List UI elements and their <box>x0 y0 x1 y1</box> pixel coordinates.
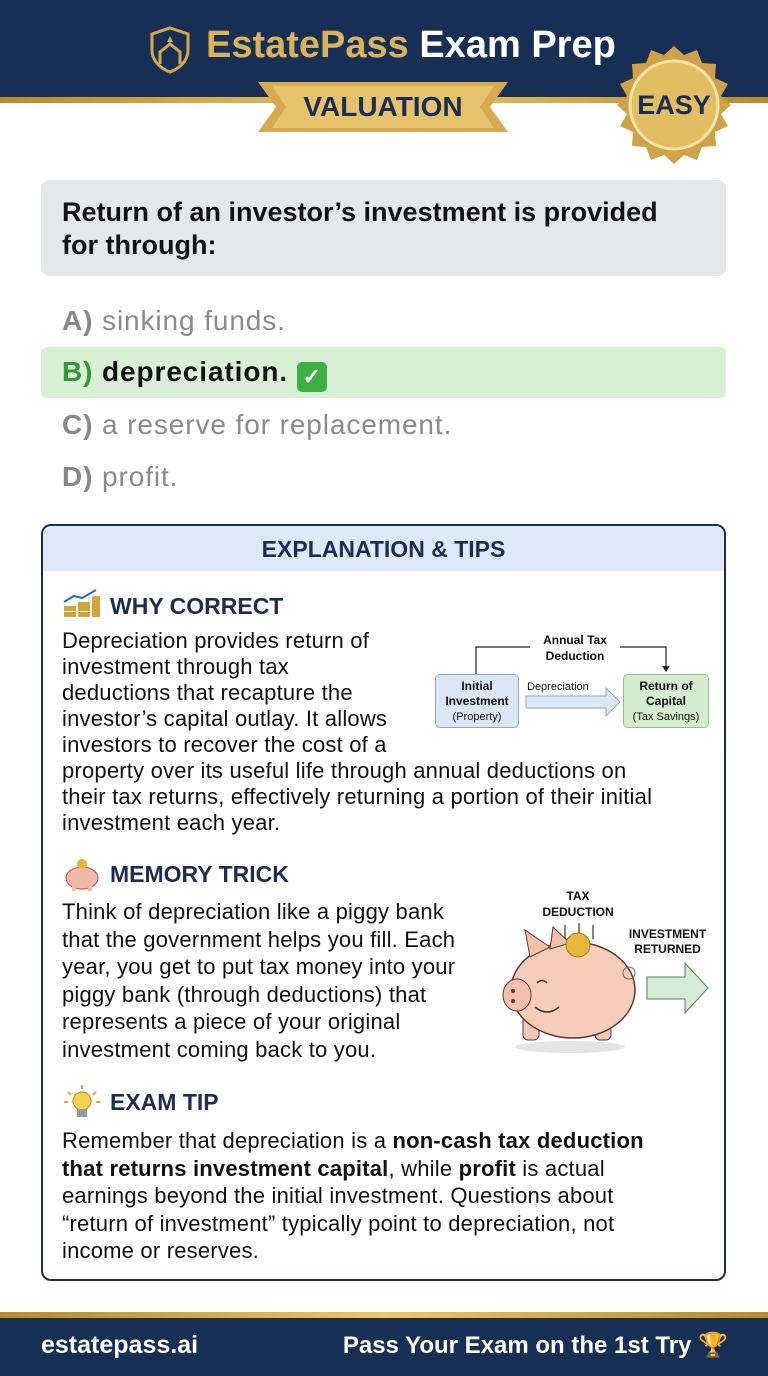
diagram: depreciation flow: (Tax Savings) <box>633 711 699 723</box>
ribbon: VALUATION <box>258 82 508 132</box>
option A: A) sinking funds. <box>62 305 286 336</box>
footer left text: estatepass.ai <box>41 1331 198 1359</box>
text: why correct: deductions that recapture the <box>62 680 353 705</box>
question box <box>41 180 726 276</box>
diagram: depreciation flow: Capital <box>646 694 686 708</box>
text: why correct: investment through tax <box>62 654 289 679</box>
diagram: depreciation flow: Depreciation <box>527 681 589 693</box>
icon: coins chart <box>64 589 100 617</box>
footer <box>0 1312 768 1376</box>
text: why correct: investor’s capital outlay. It allows <box>62 706 387 731</box>
illustration: piggy bank: INVESTMENT <box>629 927 706 941</box>
illustration: piggy bank: RETURNED <box>634 942 701 956</box>
text: exam tip <box>62 1128 644 1263</box>
icon: piggy <box>66 859 98 891</box>
heading: why correct: WHY CORRECT <box>110 593 283 619</box>
text: why correct: investment each year. <box>62 810 280 835</box>
footer right text: Pass Your Exam on the 1st Try 🏆 <box>343 1332 728 1359</box>
diagram: depreciation flow <box>435 633 709 728</box>
illustration: piggy bank <box>502 889 709 1053</box>
text: why correct <box>62 628 652 835</box>
title: EstatePass Exam Prep <box>206 24 616 66</box>
text: memory trick <box>62 899 455 1062</box>
panel header <box>43 526 724 571</box>
option B (correct) <box>41 347 726 398</box>
panel: explanation <box>41 524 726 1281</box>
diagram: depreciation flow: (Property) <box>453 711 501 723</box>
option B (correct): B) depreciation. <box>62 356 288 387</box>
heading: memory trick: MEMORY TRICK <box>110 861 289 887</box>
text: memory trick: piggy bank (through deductions) that <box>62 982 426 1006</box>
option D: D) profit. <box>62 461 178 492</box>
badge: EASY: EASY <box>637 90 711 120</box>
text: memory trick: Think of depreciation like a piggy bank <box>62 899 444 924</box>
illustration: piggy bank: TAX <box>566 889 590 903</box>
diagram: depreciation flow: Initial <box>461 679 493 693</box>
diagram: depreciation flow: Return of <box>639 679 693 693</box>
diagram: depreciation flow: Annual Tax Deduction <box>543 633 607 663</box>
heading: exam tip: EXAM TIP <box>110 1089 219 1115</box>
text: memory trick: year, you get to put tax money into your <box>62 954 455 979</box>
ribbon: VALUATION: VALUATION <box>303 91 463 122</box>
option C: C) a reserve for replacement. <box>62 409 452 440</box>
text: why correct: their tax returns, effectively returning a portion of their initial <box>62 784 652 809</box>
header band <box>0 0 768 97</box>
icon: lightbulb <box>64 1085 100 1117</box>
diagram: depreciation flow: Investment <box>445 694 509 708</box>
badge: EASY <box>617 46 731 164</box>
question box: Return of an investor’s investment is provided <box>62 197 658 227</box>
text: exam tip: Remember that depreciation is a non-cash tax deduction <box>62 1128 644 1153</box>
text: exam tip: “return of investment” typically point to depreciation, not <box>62 1210 614 1236</box>
text: why correct: investors to recover the cost of a <box>62 732 387 757</box>
text: exam tip: earnings beyond the initial investment. Questions about <box>62 1183 614 1208</box>
text: memory trick: represents a piece of your original <box>62 1009 400 1034</box>
illustration: piggy bank: DEDUCTION <box>542 905 614 919</box>
text: why correct: property over its useful life through annual deductions on <box>62 758 626 783</box>
question box: for through: <box>62 230 216 260</box>
logo shield icon <box>150 26 190 74</box>
panel header: EXPLANATION & TIPS <box>262 536 505 562</box>
text: exam tip: that returns investment capital, while profit is actual <box>62 1156 605 1180</box>
option B (correct): ✓ <box>302 364 321 389</box>
text: memory trick: investment coming back to you. <box>62 1036 376 1062</box>
text: memory trick: that the government helps you fill. Each <box>62 926 455 952</box>
text: why correct: Depreciation provides return of <box>62 628 369 653</box>
text: exam tip: income or reserves. <box>62 1238 259 1263</box>
